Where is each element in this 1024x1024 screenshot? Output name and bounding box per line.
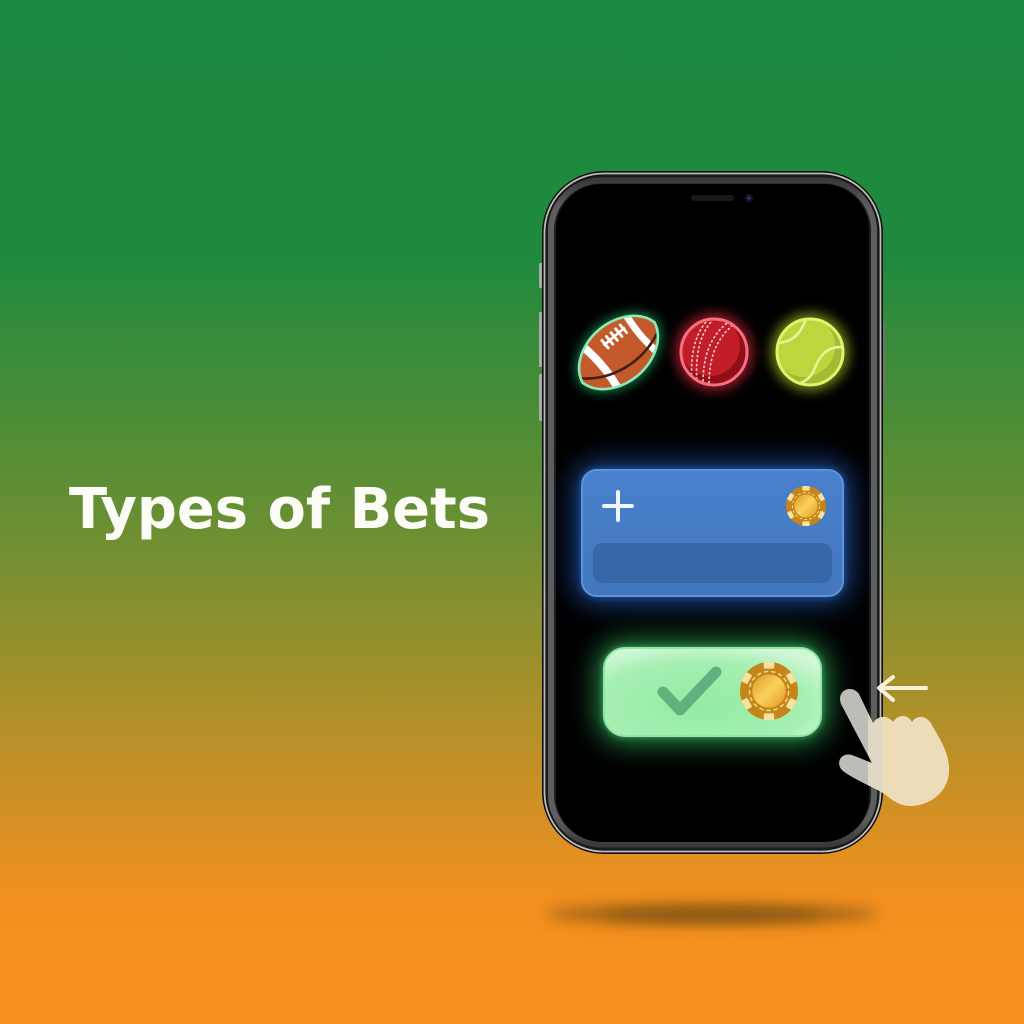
icon: check mark (663, 672, 716, 710)
icon: swipe arrow (879, 677, 926, 700)
icon: cricket ball (675, 313, 753, 391)
phone (539, 171, 885, 854)
speaker and camera (691, 194, 753, 202)
phone body (542, 171, 883, 854)
panel: green confirm button (598, 642, 827, 742)
inner field (593, 543, 832, 583)
panel: blue bet card (576, 464, 849, 602)
icon: tapping hand (839, 689, 949, 806)
icon: large gold chip (740, 662, 798, 720)
side buttons (539, 263, 885, 421)
icon: gold chip (786, 486, 826, 526)
icon: plus (604, 492, 632, 520)
icon: tennis ball (771, 313, 849, 391)
floating phone shadow (546, 903, 878, 925)
title: Types of Bets (69, 477, 490, 542)
icon: american football (568, 304, 669, 400)
